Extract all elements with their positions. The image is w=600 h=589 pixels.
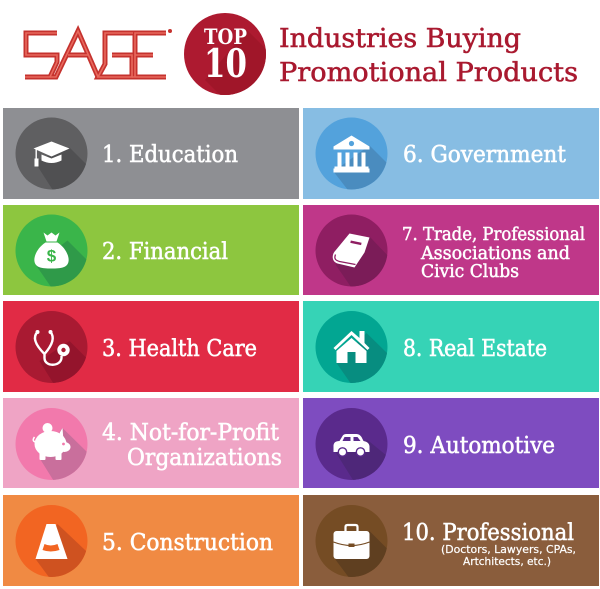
- title: Industries Buying: [279, 24, 521, 54]
- label: Organizations: [127, 445, 282, 471]
- label: 3. Health Care: [102, 336, 257, 362]
- label: 4. Not-for-Profit: [102, 420, 280, 446]
- panel: 3 Health Care: [3, 301, 299, 392]
- label: Artchitects, etc.): [463, 556, 551, 568]
- label: 5. Construction: [102, 530, 273, 556]
- icon: bank building: [316, 118, 388, 190]
- panel: 1 Education: [3, 108, 299, 199]
- badge: Top 10: [184, 13, 266, 95]
- icon: stethoscope: [16, 311, 88, 383]
- label: 6. Government: [403, 142, 567, 168]
- panel: 10 Professional: [303, 495, 599, 589]
- label: 10. Professional: [402, 520, 574, 546]
- label: 7. Trade, Professional: [402, 225, 585, 245]
- panel: 6 Government: [303, 108, 599, 199]
- label: 8. Real Estate: [403, 336, 547, 362]
- panel: 7 Trade: [303, 205, 599, 295]
- panel: 9 Automotive: [303, 398, 599, 488]
- panel: 4 Not-for-Profit: [3, 398, 299, 488]
- label: (Doctors, Lawyers, CPAs,: [441, 544, 576, 556]
- panel: 5 Construction: [3, 495, 299, 589]
- title: [279, 24, 578, 88]
- icon: money bag: [16, 214, 88, 286]
- icon: piggy bank: [16, 408, 88, 480]
- label: Associations and: [420, 244, 570, 264]
- icon: traffic cone: [16, 505, 88, 577]
- title: Promotional Products: [279, 58, 578, 88]
- label: [402, 520, 576, 568]
- badge: Top 10: 10: [204, 41, 247, 87]
- panel: 2 Financial: [3, 205, 299, 295]
- icon: money bag: $: [47, 246, 57, 266]
- label: [102, 420, 282, 471]
- label: Civic Clubs: [421, 262, 519, 282]
- icon: graduation cap: [16, 118, 88, 190]
- label: 9. Automotive: [403, 433, 555, 459]
- logo: SAGE: [25, 29, 172, 77]
- icon: briefcase: [316, 505, 388, 577]
- panel: 8 Real Estate: [303, 301, 599, 392]
- icon: car: [316, 408, 388, 480]
- icon: house: [316, 311, 388, 383]
- label: 2. Financial: [102, 239, 228, 265]
- label: [402, 225, 585, 282]
- icon: book: [316, 214, 388, 286]
- badge: Top 10: TOP: [204, 24, 247, 49]
- label: 1. Education: [102, 142, 238, 168]
